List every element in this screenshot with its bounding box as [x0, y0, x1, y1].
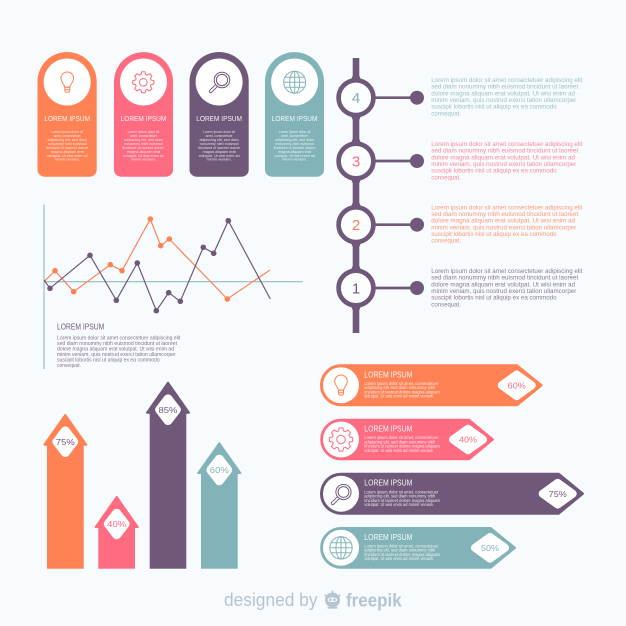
icon: magnifier [211, 72, 230, 91]
icon: magnifier [333, 484, 351, 503]
arrow bar 85% [147, 383, 189, 569]
chart text: Lorem ipsum dolor sit amet consectetuer adipiscing elit [57, 336, 181, 342]
banner text: volutpat. Ut wisi enim ad minim veniam. [364, 448, 434, 453]
percent badge [543, 483, 573, 504]
icon: gear [329, 428, 353, 451]
timeline step 4 [339, 76, 583, 120]
card 2 text: minim veniam, [131, 157, 156, 162]
arrow bar 85%: 85% [158, 405, 178, 415]
card 1 text: magna aliquam erat [51, 149, 85, 154]
arrow bar 75%: 75% [56, 437, 75, 447]
line chart [44, 205, 303, 369]
chart text: suscipit lobortis nisl ut aliquip ex ea commodo [57, 357, 160, 363]
chart text: dolore magna aliquam erat volutpat. Ut wisi enim ad [57, 347, 174, 353]
banner 75% purple [321, 474, 583, 514]
card 3 text: minim veniam, [207, 157, 232, 162]
timeline step 1: consequat. [431, 301, 461, 308]
chart heading: LOREM IPSUM [57, 322, 105, 332]
card 2 text: Lorem ipsum dolor sit [128, 129, 160, 134]
banner text: adipiscing elit, sed diam nonummy nibh [364, 548, 436, 553]
timeline step 3: Lorem ipsum dolor sit amet consectetuer adipiscing elit [431, 141, 583, 148]
banner text: Lorem ipsum dolor sit amet, consectetuer [364, 435, 439, 440]
panel: card 4 teal [265, 52, 324, 177]
card 3 text: amet, consectetuer [206, 133, 233, 138]
card 2 text: nonummy nibh euismod [124, 141, 163, 146]
card 4 text: volutpat. Ut wisi enim ad [274, 153, 315, 158]
banner text: adipiscing elit, sed diam nonummy nibh [364, 439, 436, 444]
card 4 text: nonummy nibh euismod [275, 141, 314, 146]
card 1 text: minim veniam, [55, 157, 80, 162]
percent badge [453, 429, 483, 450]
banner text [364, 544, 440, 561]
percent badge [475, 537, 505, 559]
percent badge [502, 374, 532, 396]
banner text: adipiscing elit, sed diam nonummy nibh [364, 494, 436, 499]
card 3 text [198, 129, 240, 162]
banner text: Lorem ipsum dolor sit amet, consectetuer [364, 381, 439, 386]
timeline step 1: suscipit lobortis nisl ut aliquip ex ea commodo [431, 295, 557, 302]
timeline step 2: 2 [352, 217, 360, 234]
timeline step 4: minim veniam, quis nostrud exerci tation ullamcorper [431, 97, 576, 104]
timeline step 4: 4 [352, 90, 360, 107]
card 1 text: volutpat. Ut wisi enim ad [47, 153, 88, 158]
banner text: tincidunt ut laoreet dolore magna aliquam [364, 444, 440, 449]
card 3 text: adipiscing elit, sed diam [199, 137, 239, 142]
banner heading: LOREM IPSUM [364, 533, 413, 542]
banner text: volutpat. Ut wisi enim ad minim veniam. [364, 502, 434, 507]
card 4 text: magna aliquam erat [278, 149, 312, 154]
timeline step 4: suscipit lobortis nisl ut aliquip ex ea commodo [431, 104, 557, 111]
timeline step 2: minim veniam, quis nostrud exerci tation ullamcorper [431, 224, 576, 231]
arrow bar 40% [96, 497, 138, 569]
card 3 text: nonummy nibh euismod [200, 141, 239, 146]
banner text: Lorem ipsum dolor sit amet, consectetuer [364, 544, 439, 548]
timeline step 2: suscipit lobortis nisl ut aliquip ex ea commodo [431, 231, 557, 238]
percent badge: 50% [481, 543, 499, 553]
timeline step 1: sed diam nonummy nibh euismod tincidunt ut laoreet [431, 275, 579, 282]
card 1 heading: LOREM IPSUM [44, 114, 90, 123]
timeline step 2: dolore magna aliquam erat volutpat. Ut wisi enim ad [431, 218, 576, 225]
card 1 text: amet, consectetuer [54, 133, 81, 138]
panel: card 2 pink [114, 52, 173, 177]
banner heading: LOREM IPSUM [364, 424, 413, 434]
banner text [364, 381, 440, 399]
timeline step 4: dolore magna aliquam erat volutpat. Ut wisi enim ad [431, 90, 576, 97]
timeline step 1: Lorem ipsum dolor sit amet consectetuer adipiscing elit [431, 268, 583, 275]
banner text: volutpat. Ut wisi enim ad minim veniam. [364, 556, 434, 561]
timeline step 1 [339, 266, 583, 310]
panel: card 3 purple [190, 52, 249, 177]
timeline step 3: consequat. [431, 174, 461, 181]
icon: light bulb [61, 72, 74, 92]
banner text [364, 435, 440, 453]
arrow bar 75% [44, 415, 86, 569]
card 1 text: adipiscing elit, sed diam [48, 137, 87, 142]
banner text: volutpat. Ut wisi enim ad minim veniam. [364, 394, 434, 399]
card 2 text: magna aliquam erat [127, 149, 161, 154]
footer credit: designed by [224, 590, 318, 610]
arrow bar 40%: 40% [107, 519, 127, 529]
chart text [57, 336, 181, 369]
timeline step 2: Lorem ipsum dolor sit amet consectetuer adipiscing elit [431, 204, 583, 211]
card 2 text: amet, consectetuer [130, 133, 158, 138]
card 4 text: amet, consectetuer [281, 133, 309, 138]
icon: freepik logo [324, 590, 340, 608]
banner text: tincidunt ut laoreet dolore magna aliquam [364, 389, 440, 394]
timeline step 2: sed diam nonummy nibh euismod tincidunt ut laoreet [431, 211, 579, 218]
timeline step 1: 1 [352, 280, 360, 297]
timeline step 3: dolore magna aliquam erat volutpat. Ut wisi enim ad [431, 154, 576, 161]
banner text: tincidunt ut laoreet dolore magna aliquam [364, 552, 440, 557]
card 4 text: Lorem ipsum dolor sit [279, 129, 311, 134]
card 1 text: nonummy nibh euismod [48, 141, 87, 146]
card 3 text: volutpat. Ut wisi enim ad [199, 153, 240, 158]
icon: gear [133, 72, 154, 93]
card 1 text: Lorem ipsum dolor sit [51, 129, 84, 134]
timeline step 4: sed diam nonummy nibh euismod tincidunt ut laoreet [431, 84, 579, 91]
timeline step 1: minim veniam, quis nostrud exerci tation ullamcorper [431, 288, 576, 295]
card 1 text: tincidunt ut laoreet dolore [46, 145, 88, 150]
timeline step 3: sed diam nonummy nibh euismod tincidunt ut laoreet [431, 148, 579, 155]
timeline step 2: consequat. [431, 238, 461, 245]
card 3 text: magna aliquam erat [203, 149, 236, 154]
card 3 text: Lorem ipsum dolor sit [203, 129, 236, 134]
chart text: consequat. [57, 363, 81, 369]
orange series [44, 216, 270, 302]
card 2 text: volutpat. Ut wisi enim ad [123, 153, 164, 158]
panel: numbered timeline [339, 58, 583, 333]
timeline step 3: minim veniam, quis nostrud exerci tation ullamcorper [431, 161, 576, 168]
banner text: tincidunt ut laoreet dolore magna aliquam [364, 498, 440, 503]
card 4 text: tincidunt ut laoreet dolore [274, 145, 316, 150]
banner heading: LOREM IPSUM [364, 370, 413, 379]
banner heading: LOREM IPSUM [364, 478, 413, 488]
chart text: sed diam nonummy nibh euismod tincidunt ut laoreet [57, 341, 178, 347]
banner 60% orange [321, 365, 542, 405]
card 3 heading: LOREM IPSUM [196, 114, 242, 123]
banner 50% teal [321, 528, 515, 568]
percent badge: 40% [459, 435, 477, 445]
card 2 text: tincidunt ut laoreet dolore [122, 145, 164, 150]
banner text: adipiscing elit, sed diam nonummy nibh [364, 385, 436, 390]
footer credit [224, 590, 403, 611]
purple series [44, 218, 270, 314]
timeline step 4: consequat. [431, 110, 461, 117]
timeline step 2 [339, 203, 583, 247]
footer credit: freepik [346, 591, 403, 611]
timeline step 3: suscipit lobortis nisl ut aliquip ex ea commodo [431, 168, 557, 175]
card 1 text [46, 129, 88, 162]
icon: light bulb [335, 375, 347, 395]
icon: globe [330, 537, 352, 559]
timeline step 3 [339, 139, 583, 183]
icon: globe [284, 71, 306, 93]
arrow bar 60%: 60% [210, 465, 229, 475]
card 4 heading: LOREM IPSUM [272, 114, 317, 123]
arrow bar 60% [198, 443, 240, 569]
card 4 text [274, 129, 316, 162]
card 2 heading: LOREM IPSUM [121, 114, 166, 123]
percent badge: 60% [508, 380, 526, 390]
timeline step 3: 3 [352, 153, 360, 170]
banner text: Lorem ipsum dolor sit amet, consectetuer [364, 489, 439, 494]
timeline step 4: Lorem ipsum dolor sit amet consectetuer adipiscing elit [431, 77, 583, 84]
panel: card 1 orange [38, 52, 97, 177]
card 4 text: minim veniam, [282, 157, 307, 162]
percent badge: 75% [549, 489, 567, 499]
chart text: minim veniam, quis nostrud exerci tation ullamcorper [57, 352, 176, 358]
card 2 text [122, 129, 164, 162]
card 4 text: adipiscing elit, sed diam [275, 137, 314, 142]
timeline step 1: dolore magna aliquam erat volutpat. Ut wisi enim ad [431, 281, 576, 288]
card 3 text: tincidunt ut laoreet dolore [198, 145, 240, 150]
card 2 text: adipiscing elit, sed diam [124, 137, 163, 142]
banner text [364, 489, 440, 507]
banner 40% pink [321, 420, 493, 459]
